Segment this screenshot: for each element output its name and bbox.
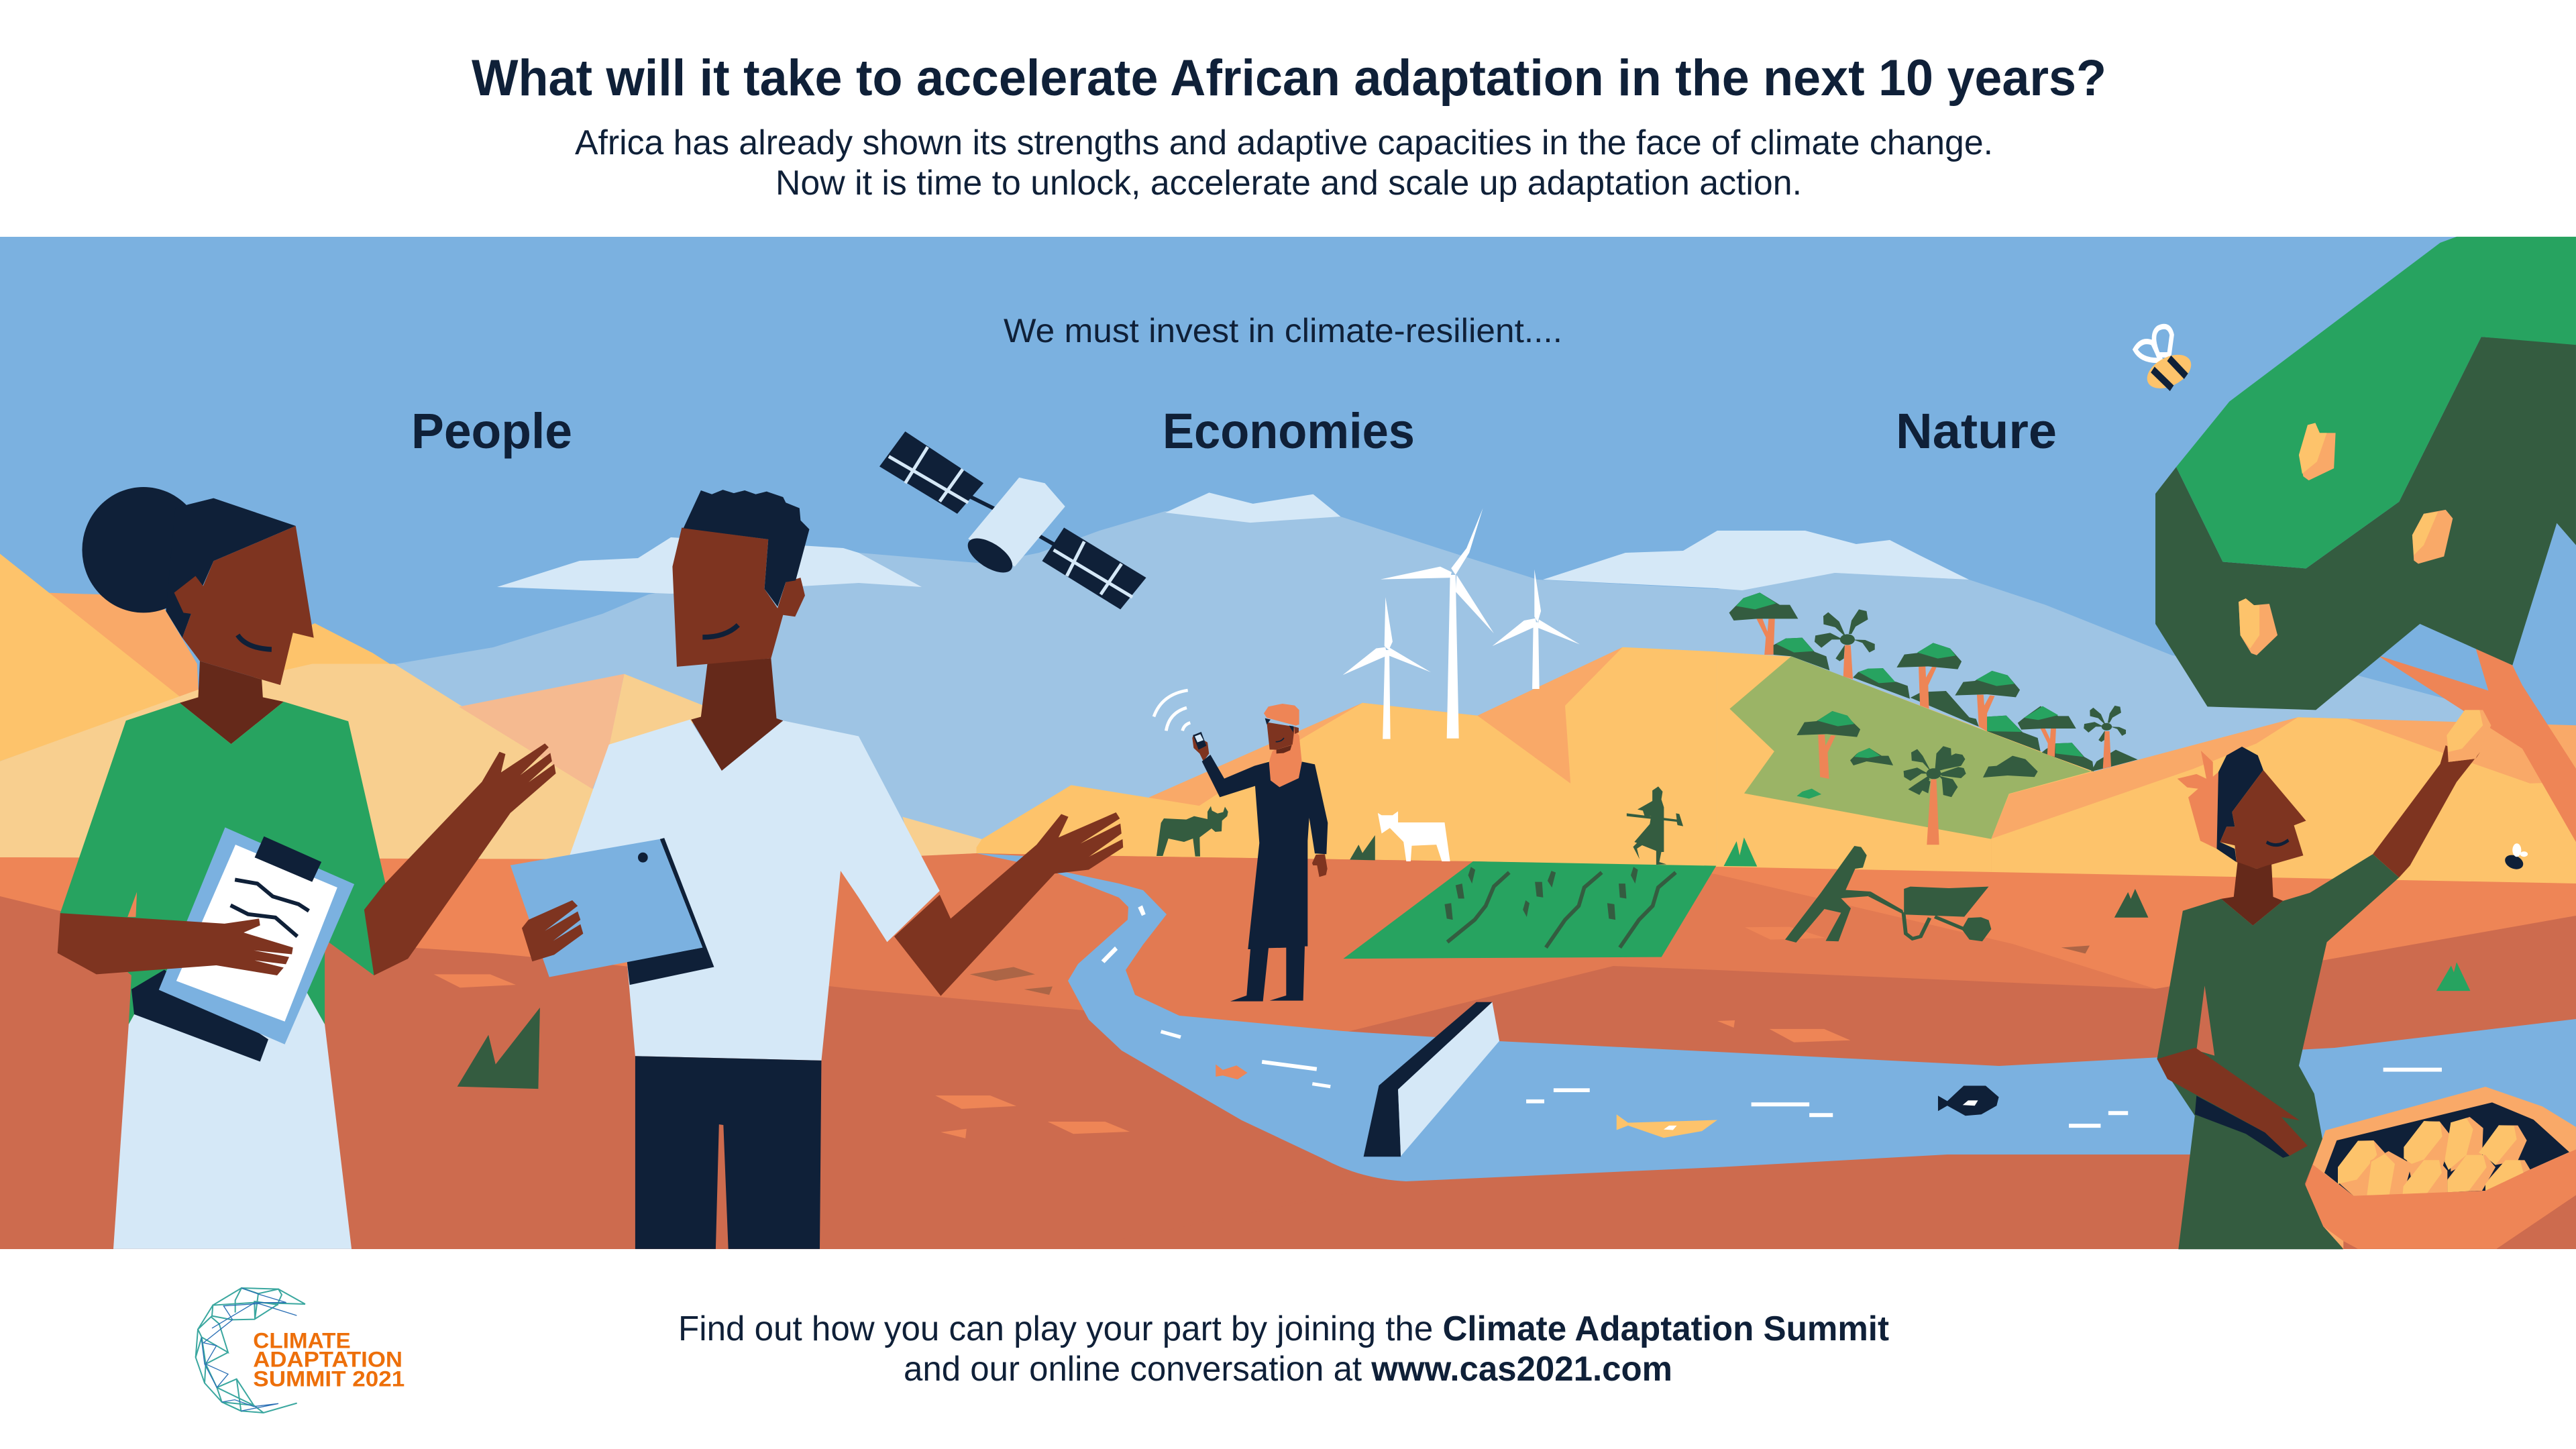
subtitle: Now it is time to unlock, accelerate and scale up adaptation action. bbox=[775, 164, 1802, 203]
sky bbox=[0, 237, 2576, 1249]
green top bbox=[60, 702, 386, 1024]
clouds bbox=[497, 492, 1969, 594]
river ripples and fish, right bbox=[1752, 1068, 2442, 1128]
face bbox=[2220, 770, 2306, 869]
footer call to action: and our online conversation at www.cas2021.com bbox=[904, 1350, 1672, 1389]
fruit pile bbox=[2338, 1117, 2530, 1196]
dress bbox=[113, 992, 352, 1249]
woman picking fruit bbox=[2157, 710, 2491, 1249]
shirt bbox=[570, 720, 940, 1061]
trees behind the terrace bbox=[1729, 592, 2138, 771]
ground bbox=[0, 853, 2576, 1249]
subtitle bbox=[575, 123, 1993, 203]
farmer with phone bbox=[1154, 690, 1328, 1002]
trousers bbox=[635, 1056, 821, 1249]
headscarf bbox=[2178, 751, 2218, 849]
neck bbox=[2221, 862, 2283, 926]
title: What will it take to accelerate African adaptation in the next 10 years? bbox=[472, 50, 2106, 107]
crop field bbox=[1343, 861, 1716, 959]
fruit bbox=[2239, 423, 2453, 655]
green canopy bbox=[2176, 237, 2576, 568]
dark canopy bbox=[2155, 337, 2576, 710]
tree bbox=[2155, 237, 2576, 842]
dress bbox=[2157, 854, 2399, 1249]
ground patches bbox=[434, 967, 1130, 1138]
raised arm bbox=[364, 743, 556, 975]
bee, small bbox=[2504, 843, 2528, 871]
plants and patches on the right ground bbox=[1717, 889, 2470, 1042]
logo: Climate Adaptation Summit 2021: CLIMATE bbox=[253, 1328, 351, 1352]
olive terrace bbox=[1729, 656, 2091, 839]
logo: Climate Adaptation Summit 2021: ADAPTATION bbox=[253, 1348, 402, 1372]
outstretched arm bbox=[894, 812, 1123, 996]
small shrub bbox=[1350, 835, 1375, 860]
footer call to action: Find out how you can play your part by joining the Climate Adaptation Summit bbox=[678, 1309, 1889, 1348]
figure with hoe bbox=[1627, 786, 1683, 865]
heading: Nature: Nature bbox=[1896, 403, 2057, 459]
head bbox=[672, 528, 805, 667]
river ripples and fish, centre bbox=[1102, 906, 1717, 1138]
logo: Climate Adaptation Summit 2021 bbox=[196, 1288, 405, 1413]
satellite bbox=[879, 431, 1146, 609]
footer call to action bbox=[678, 1309, 1889, 1389]
held fruit bbox=[2447, 710, 2491, 762]
clipboard bbox=[131, 827, 354, 1061]
right hills bbox=[1717, 652, 2576, 902]
hair bbox=[82, 487, 296, 638]
trees on the terrace bbox=[1796, 711, 2038, 845]
hair bbox=[684, 490, 809, 606]
wind turbines bbox=[1343, 508, 1580, 739]
trunk bbox=[2377, 649, 2576, 842]
river foreground bank bbox=[1073, 1155, 2576, 1249]
dam bbox=[1364, 1002, 1499, 1157]
bee, large bbox=[2135, 327, 2195, 395]
heading: We must invest: We must invest in climate-resilient.... bbox=[1004, 312, 1562, 350]
plant: foreground shrub bbox=[458, 1008, 540, 1089]
hair bbox=[2216, 747, 2263, 862]
small plant by field bbox=[1724, 837, 1757, 867]
neck bbox=[691, 658, 783, 771]
left hills bbox=[0, 554, 704, 864]
face bbox=[174, 526, 314, 685]
basket of fruit bbox=[2306, 1087, 2576, 1249]
subtitle: Africa has already shown its strengths and adaptive capacities in the face of climate change. bbox=[575, 123, 1993, 162]
heading: People: People bbox=[411, 403, 572, 459]
neck bbox=[180, 661, 284, 744]
green cow bbox=[1157, 806, 1228, 857]
woman with clipboard bbox=[58, 487, 556, 1249]
middle hills bbox=[902, 647, 1717, 881]
grove of trees on hillside bbox=[1729, 592, 2138, 845]
distant mountains bbox=[394, 511, 2576, 939]
man with tablet bbox=[511, 490, 1123, 1249]
logo: Climate Adaptation Summit 2021: SUMMIT 2021 bbox=[253, 1367, 405, 1391]
white cow bbox=[1378, 811, 1450, 861]
raised arm bbox=[2373, 745, 2480, 877]
panel: illustrated landscape bbox=[0, 237, 2576, 1249]
arm with hand bbox=[58, 913, 293, 975]
river bbox=[977, 853, 2576, 1181]
tablet bbox=[511, 838, 714, 985]
heading: Economies: Economies bbox=[1163, 403, 1415, 459]
hand on tablet bbox=[522, 900, 583, 961]
waist arm bbox=[2195, 1095, 2290, 1158]
person pushing wheelbarrow bbox=[1745, 846, 1991, 943]
